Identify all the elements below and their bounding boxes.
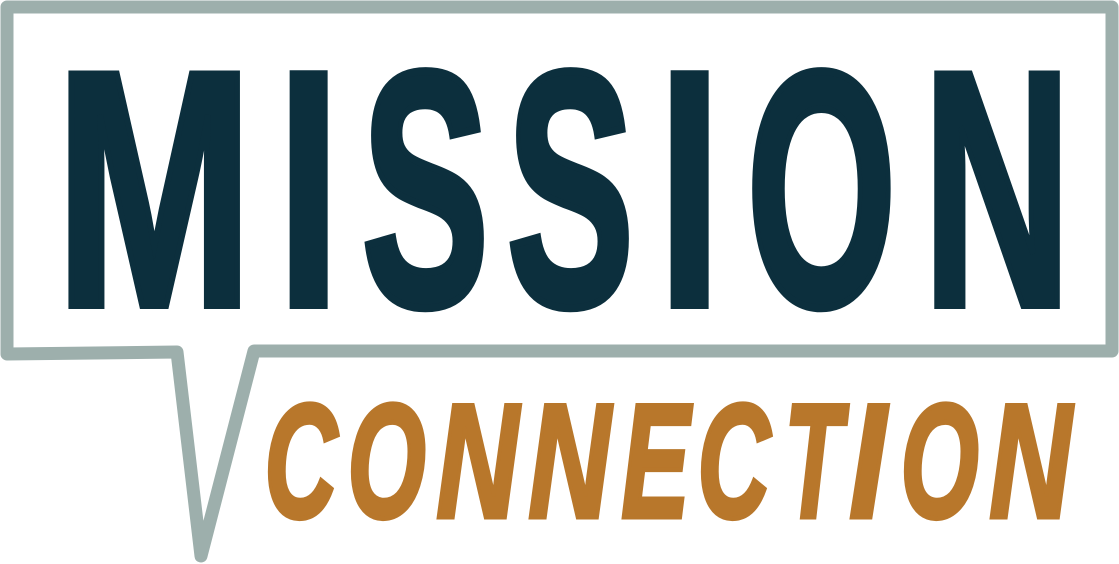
subheading: CONNECTION: C [698,370,771,552]
heading: MISSION: I [272,0,345,383]
subheading: CONNECTION: C [264,370,338,552]
heading: MISSION: S [362,2,489,376]
heading: MISSION: O [747,2,896,376]
heading: MISSION: N [923,2,1071,376]
heading: MISSION: M [55,1,253,377]
subheading: CONNECTION: N [990,370,1074,552]
subheading: CONNECTION: I [850,372,889,552]
subheading: CONNECTION: N [528,370,613,552]
subheading: CONNECTION: E [622,370,692,552]
heading: MISSION: I [653,0,726,383]
subheading: CONNECTION: T [784,371,849,552]
subheading: CONNECTION: N [436,370,521,552]
subheading: CONNECTION: O [348,370,426,552]
heading: MISSION [55,0,1071,383]
heading: MISSION: S [507,2,634,376]
subheading: CONNECTION [264,370,1074,552]
subheading: CONNECTION: O [900,370,979,552]
